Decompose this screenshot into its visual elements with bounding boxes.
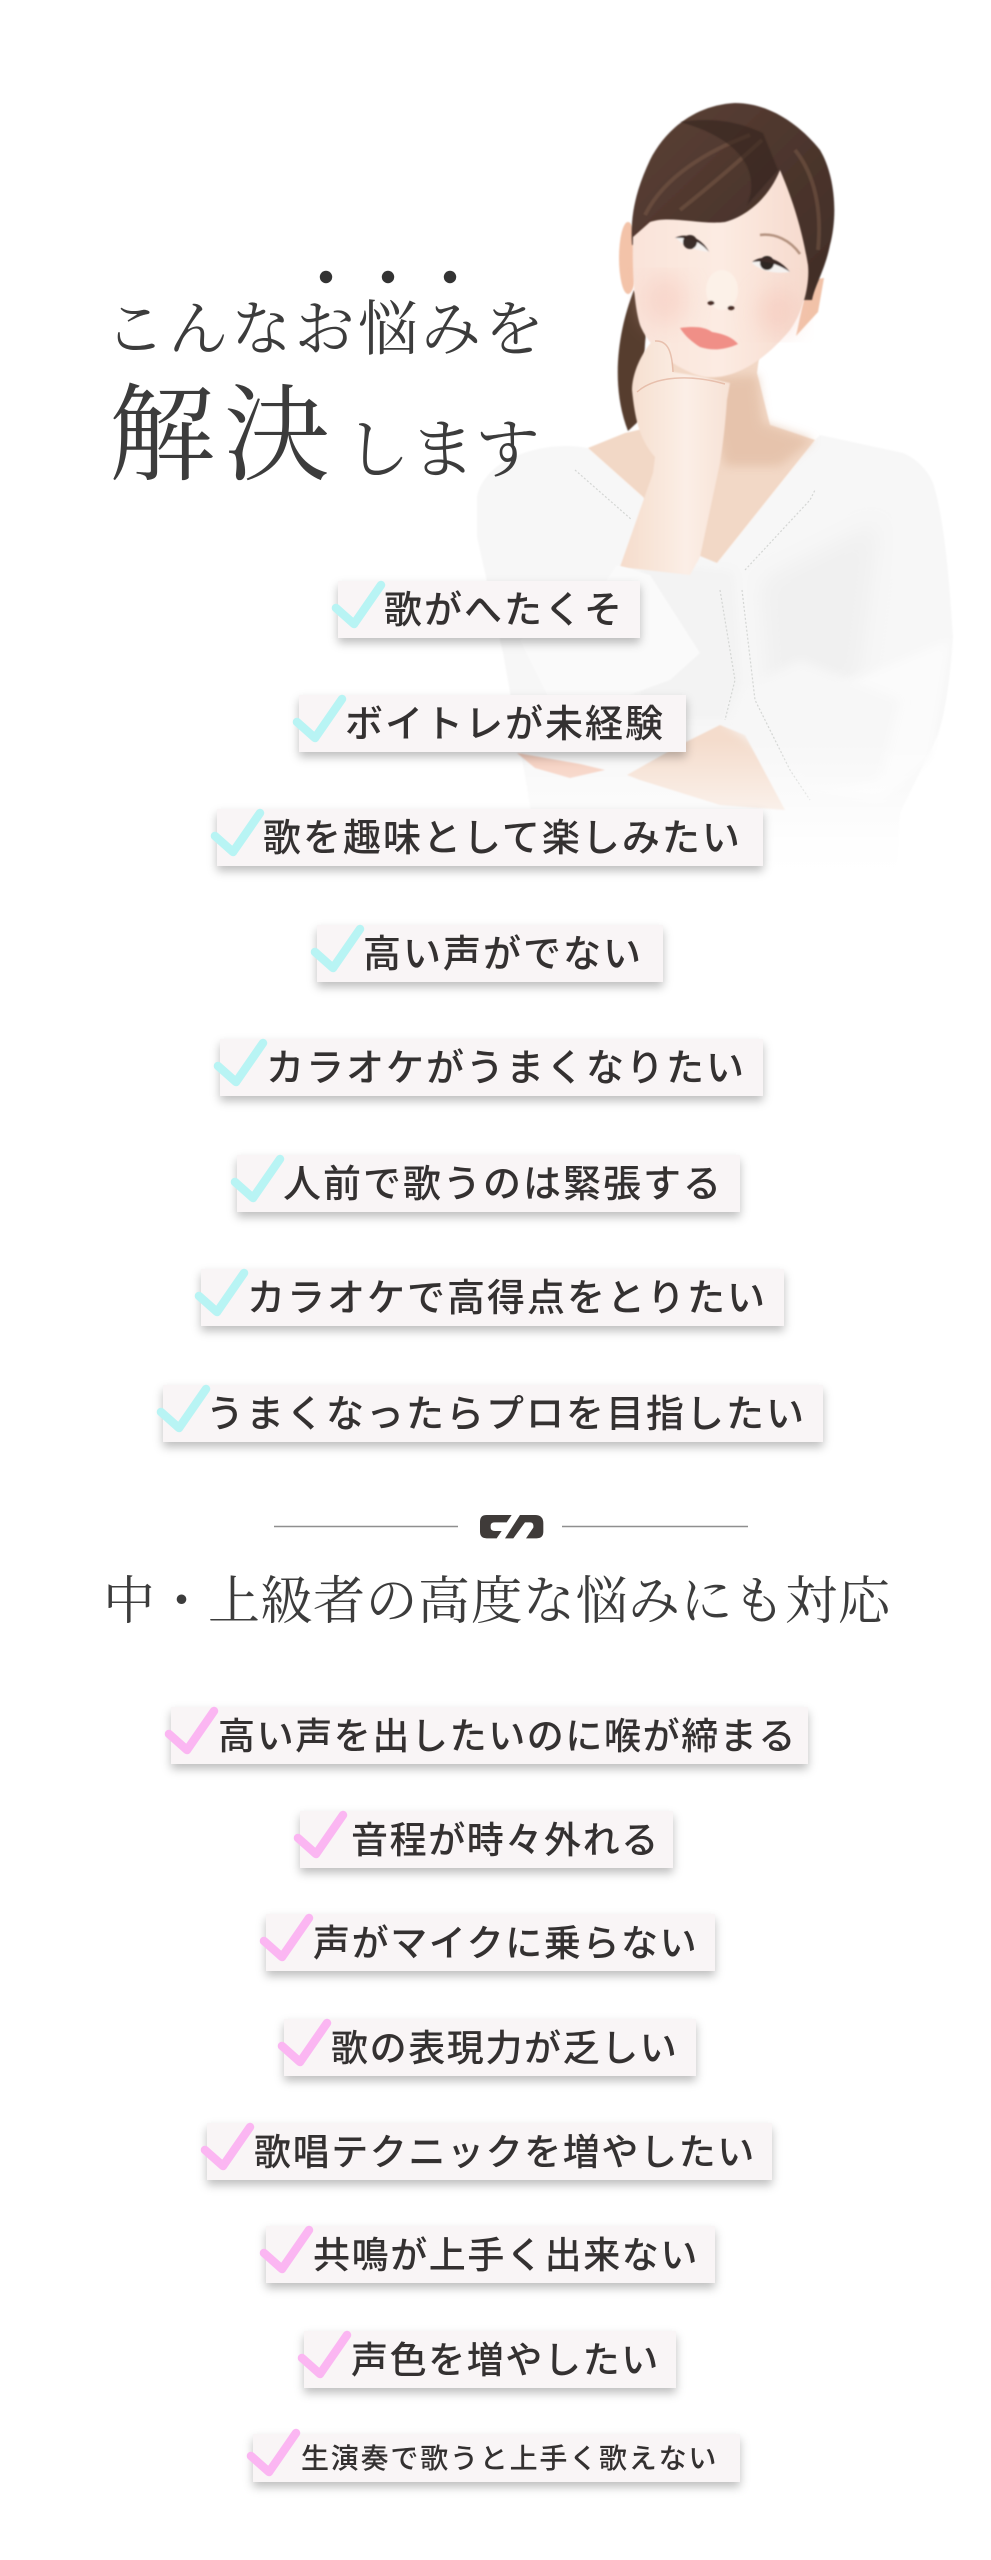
item [304,2331,676,2388]
hand creases [637,341,725,392]
item: 歌唱テクニックを増やしたい [254,2132,756,2173]
shirt stitching [575,470,815,800]
face [633,170,808,377]
shirt [477,435,953,870]
item [253,2434,740,2482]
item: 声色を増やしたい [351,2340,660,2381]
hand and forearm [620,340,730,575]
subheading: 中・上級者の高度な悩みにも対応 [103,1574,891,1631]
title dots [320,270,456,284]
item [201,1269,784,1326]
hair part shadow [680,120,778,205]
hair [632,103,834,300]
item [217,809,763,866]
ponytail [618,290,650,431]
item: 歌を趣味として楽しみたい [263,818,742,860]
item [220,1039,763,1096]
item: 生演奏で歌うと上手く歌えない [301,2443,718,2474]
neck shadow [700,375,813,466]
item: 高い声がでない [363,934,643,976]
item [163,1385,823,1442]
bottom fade [440,740,980,875]
lower forearm [627,725,785,810]
item: うまくなったらプロを目指したい [206,1394,806,1436]
cheek blush [643,274,798,336]
item [266,2226,715,2283]
item: カラオケがうまくなりたい [266,1048,746,1090]
item: 高い声を出したいのに喉が締まる [218,1716,797,1757]
item [266,1914,715,1971]
item: 人前で歌うのは緊張する [283,1164,723,1206]
fingers [517,753,605,778]
item: 共鳴が上手く出来ない [313,2235,699,2276]
item [299,695,686,752]
item: ボイトレが未経験 [345,704,665,746]
item [207,2123,772,2180]
item: カラオケで高得点をとりたい [247,1278,767,1320]
title line 1: こんなお悩みを [105,297,547,363]
photo: thoughtful woman [518,102,892,810]
eyes [675,235,800,273]
item: 声がマイクに乗らない [313,1923,698,1964]
neck and chest [588,350,815,563]
item [317,925,663,982]
logo [480,1515,543,1538]
right sleeve over forearm [725,660,900,790]
divider with logo [274,1515,748,1538]
left sleeve cuff [520,565,700,720]
item: 歌がへたくそ [384,590,624,632]
item: 音程が時々外れる [351,1820,660,1861]
item [171,1707,808,1764]
lips [680,327,738,349]
title line 2: 解決します [109,378,540,495]
item [237,1155,740,1212]
item [284,2019,696,2076]
item: 歌の表現力が乏しい [331,2028,678,2069]
item [338,581,640,638]
hair highlights [645,135,819,250]
item [300,1811,673,1868]
nose [706,270,738,310]
ears [619,222,824,336]
